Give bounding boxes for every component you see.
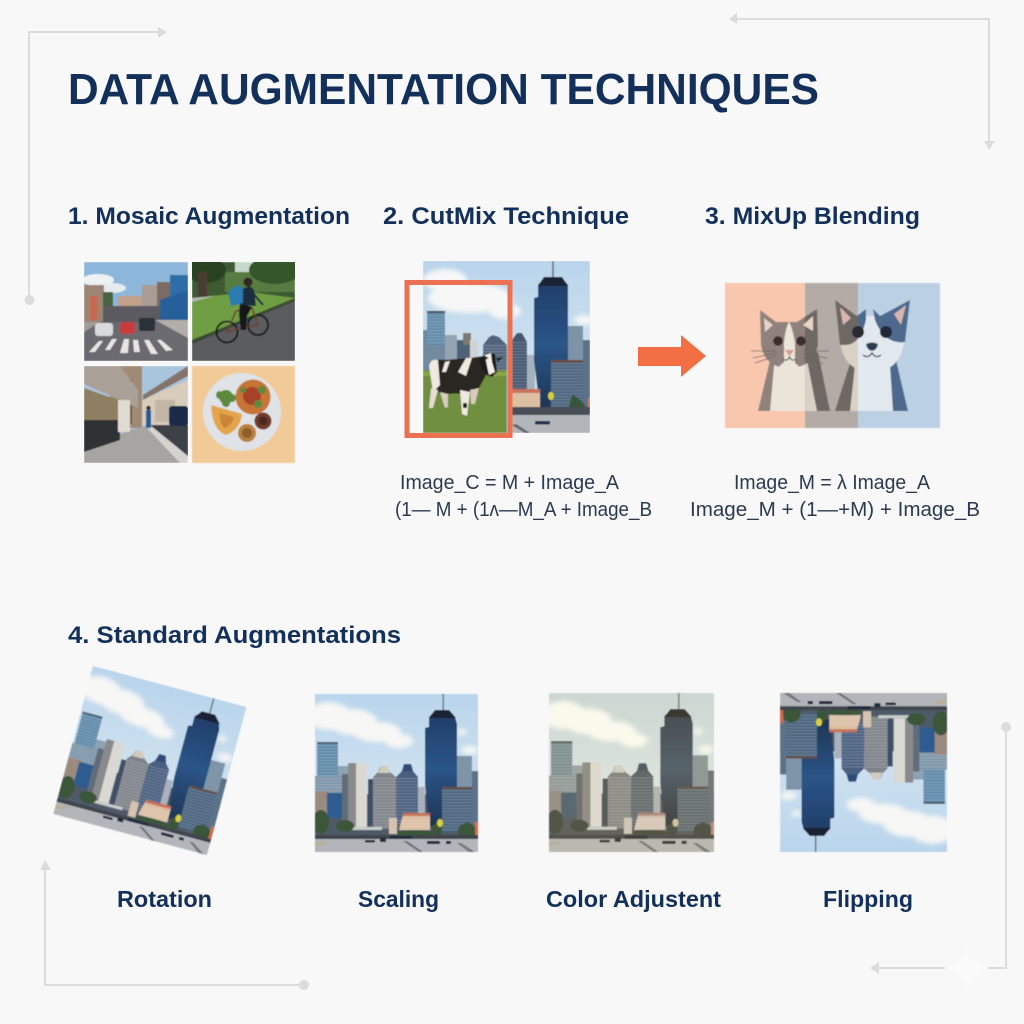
image: rotation: [46, 664, 247, 855]
cow: [429, 353, 503, 416]
decorative connector: bottom left: [40, 860, 309, 990]
cutmix formula: [395, 472, 652, 521]
mixup formula: [690, 472, 980, 521]
decorative connector: top right: [729, 13, 995, 150]
panel: cutmix technique: [383, 203, 652, 521]
heading: mixup: 3. MixUp Blending: [705, 203, 920, 230]
arrow: cutmix to mixup: [638, 335, 706, 377]
mixup formula: Image_M = λ Image_A: [734, 472, 931, 494]
cutmix formula: (1— M + (1ʌ—M_A + Image_B: [395, 499, 652, 521]
sparkle watermark: [944, 945, 990, 992]
decorative connector: top left: [24, 27, 167, 305]
label: flipping: Flipping: [823, 886, 913, 912]
heading: cutmix: 2. CutMix Technique: [383, 203, 629, 230]
cutmix formula: Image_C = M + Image_A: [400, 472, 620, 494]
panel: mixup blending: [690, 203, 980, 521]
cutmix mask frame: [407, 282, 510, 436]
mosaic tile: food plate: [192, 366, 295, 463]
image: flipping: [780, 693, 955, 852]
panel: mosaic augmentation: [68, 203, 350, 463]
heading: mosaic: 1. Mosaic Augmentation: [68, 203, 350, 230]
label: scaling: Scaling: [358, 886, 439, 912]
label: rotation: Rotation: [117, 886, 212, 912]
mosaic tile: sidewalk: [84, 366, 188, 463]
image: color adjustment: [541, 693, 714, 852]
mixup formula: Image_M + (1—+M) + Image_B: [690, 499, 980, 521]
decorative connector: bottom right: [870, 722, 1011, 974]
image: scaling: [307, 694, 478, 852]
cutmix image: city with pasted cow: [423, 261, 594, 433]
panel: standard augmentations: [46, 622, 955, 912]
mixup image: blended cat and dog: [725, 283, 940, 428]
label: color adjustment: Color Adjustent: [546, 886, 721, 912]
mosaic tile: cyclist: [192, 262, 295, 361]
heading: standard augmentations: 4. Standard Augmentations: [68, 622, 401, 649]
title: DATA AUGMENTATION TECHNIQUES: [68, 65, 819, 114]
mosaic tile: street crossing: [82, 262, 188, 361]
